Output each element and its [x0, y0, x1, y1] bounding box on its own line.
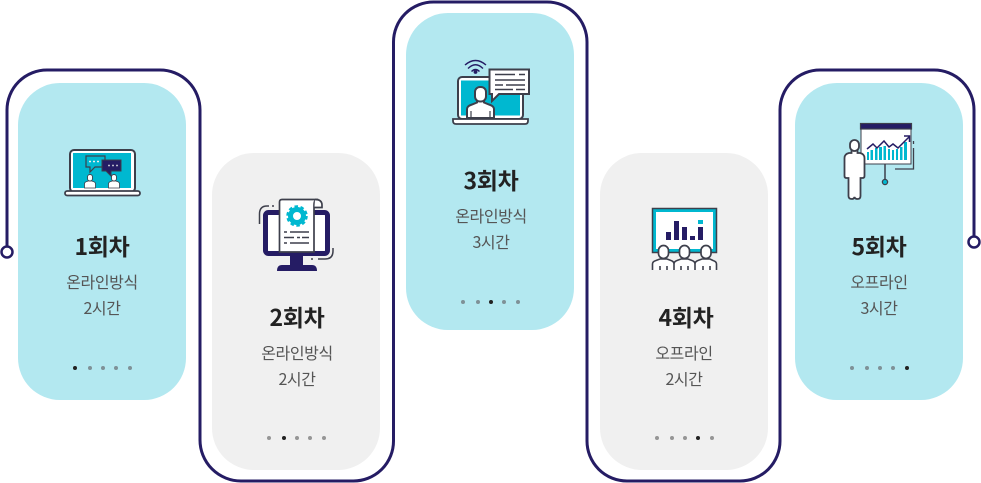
- text block: 3시간: [860, 295, 898, 319]
- text block: 2시간: [278, 366, 316, 390]
- pagination dots: [655, 436, 714, 440]
- text block: 2시간: [665, 366, 703, 390]
- text block: 온라인방식: [261, 340, 333, 364]
- text block: 오프라인: [850, 269, 908, 293]
- heading: 3회차: [464, 162, 518, 196]
- text block: [850, 269, 908, 319]
- text block: 3시간: [472, 229, 510, 253]
- icon: audience facing chart: [652, 208, 718, 270]
- icon: presenter with chart board: [844, 122, 914, 200]
- text block: [455, 203, 527, 253]
- pagination dots: [461, 300, 520, 304]
- pagination dots: [73, 366, 132, 370]
- text block: 온라인방식: [455, 203, 527, 227]
- text block: 2시간: [83, 295, 121, 319]
- icon: laptop with wifi and message: [452, 60, 530, 125]
- text block: 온라인방식: [66, 269, 138, 293]
- panel: session 3: [406, 13, 574, 330]
- icon: laptop with chat: [64, 149, 141, 196]
- heading: 2회차: [270, 299, 324, 333]
- panel: session 5: [795, 83, 963, 400]
- panel: session 2: [212, 153, 380, 470]
- text block: 오프라인: [655, 340, 713, 364]
- panel: session 4: [600, 153, 768, 470]
- text block: [655, 340, 713, 390]
- heading: 5회차: [852, 228, 906, 262]
- heading: 1회차: [74, 228, 130, 262]
- pagination dots: [850, 366, 909, 370]
- text block: [261, 340, 333, 390]
- icon: monitor with document: [258, 198, 334, 271]
- heading: 4회차: [658, 299, 714, 333]
- text block: [66, 269, 138, 319]
- panel: session 1: [18, 83, 186, 400]
- pagination dots: [267, 436, 326, 440]
